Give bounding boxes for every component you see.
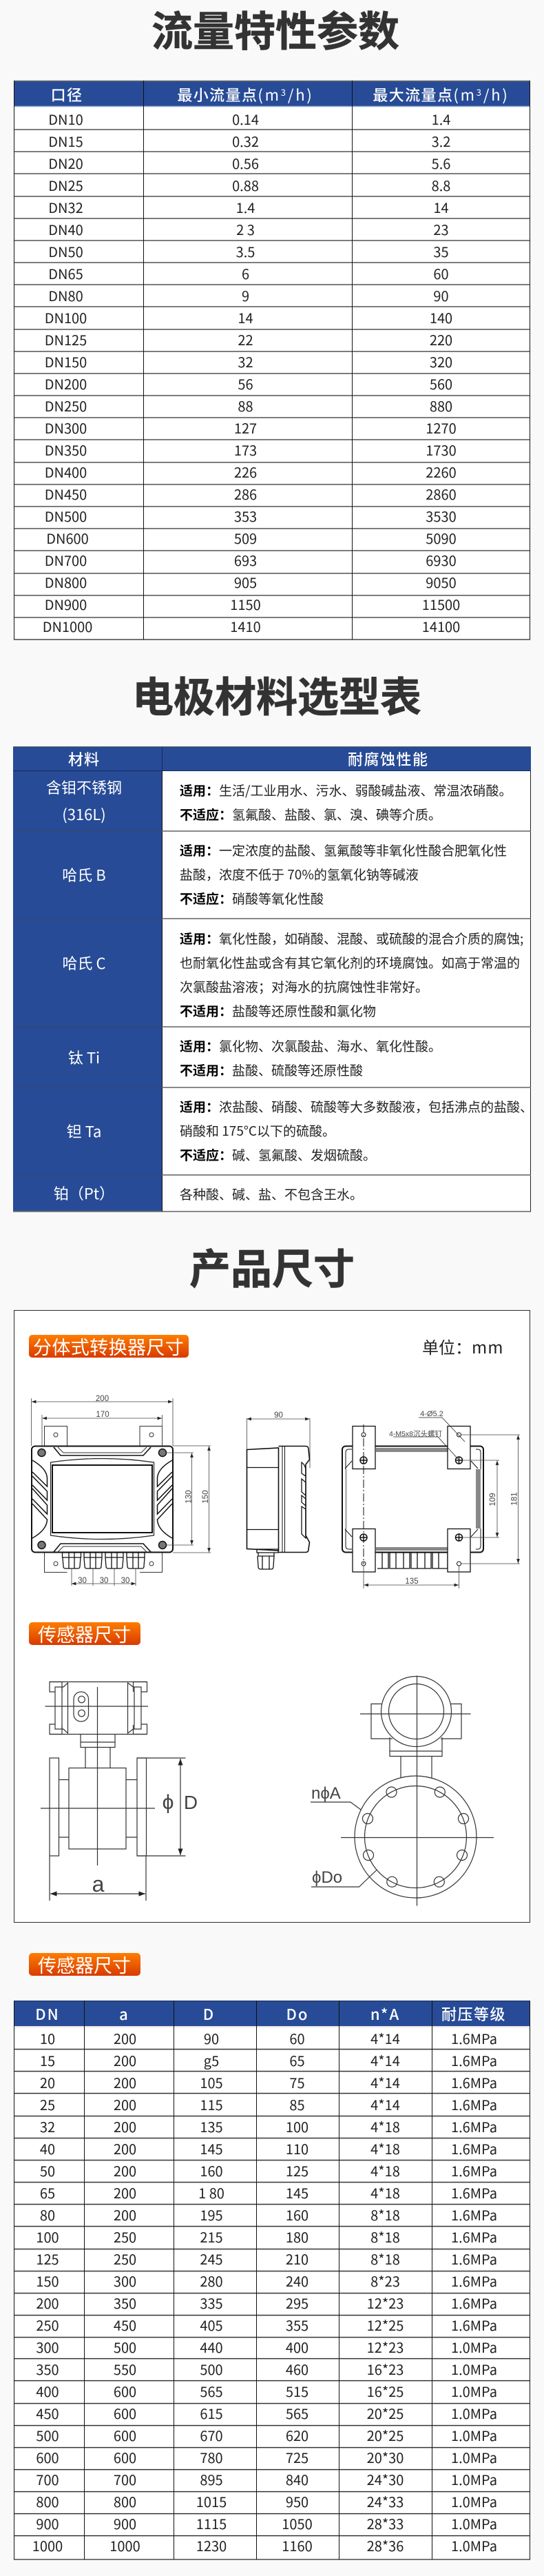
sensor dimensions table: 600 bbox=[114, 2425, 136, 2445]
sensor dimensions table: 400 bbox=[36, 2381, 59, 2401]
flow characteristic table: 0.14 bbox=[232, 109, 259, 129]
flow characteristic table: 0.56 bbox=[232, 153, 259, 173]
sensor dimensions table: 405 bbox=[200, 2315, 223, 2335]
sensor dimensions table: 840 bbox=[286, 2469, 308, 2489]
flow characteristic table: 1270 bbox=[426, 418, 457, 438]
flow characteristic table: 56 bbox=[238, 374, 253, 393]
converter front view dimensions bbox=[32, 1395, 211, 1586]
material row: titanium: 钛 Ti bbox=[68, 1046, 100, 1068]
sensor dimensions table: 20*25 bbox=[367, 2425, 404, 2445]
sensor dimensions table: 1000 bbox=[32, 2535, 63, 2555]
material row: Hastelloy C: 哈氏 C bbox=[63, 952, 105, 974]
flow characteristic table: 9050 bbox=[426, 572, 457, 592]
flow characteristic table: DN32 bbox=[48, 197, 83, 217]
flow characteristic table: 173 bbox=[234, 440, 257, 460]
sensor dimensions table: DN bbox=[35, 2003, 60, 2025]
material row: platinum: 铂（Pt） bbox=[54, 1182, 114, 1204]
sensor dimensions table: 4*18 bbox=[370, 2138, 400, 2158]
material row: Hastelloy B bbox=[13, 832, 531, 919]
sensor dimensions table: 125 bbox=[286, 2160, 308, 2180]
flow characteristic table bbox=[43, 83, 510, 636]
converter front view dimensions: 150 bbox=[202, 1490, 210, 1504]
sensor dimensions table: 12*25 bbox=[367, 2315, 404, 2335]
sensor dimensions table: 355 bbox=[286, 2315, 308, 2335]
flow characteristic table: 23 bbox=[433, 219, 449, 239]
material row: Hastelloy C: 也耐氧化性盐或含有其它氧化剂的环境腐蚀。如高于常温的 bbox=[180, 953, 520, 972]
flow characteristic table: 220 bbox=[430, 329, 452, 349]
converter front view dimensions: 170 bbox=[96, 1411, 109, 1419]
title: electrode material selection: 电极材料选型表 bbox=[132, 664, 421, 724]
material row: titanium: 不适用：盐酸、硫酸等还原性酸 bbox=[180, 1061, 363, 1079]
flow characteristic table: DN400 bbox=[45, 462, 87, 482]
sensor dimensions table: 1.6MPa bbox=[451, 2249, 497, 2269]
sensor dimensions table: 335 bbox=[200, 2293, 223, 2313]
sensor dimensions table: 160 bbox=[200, 2160, 223, 2180]
sensor dimensions table: 1.0MPa bbox=[451, 2535, 497, 2555]
sensor dimensions table: 615 bbox=[200, 2403, 223, 2423]
sensor dimensions table: 800 bbox=[114, 2491, 136, 2511]
sensor dimensions table: 725 bbox=[286, 2447, 308, 2467]
sensor dimensions table: 8*18 bbox=[370, 2227, 400, 2247]
converter rear view dimensions: 135 bbox=[405, 1577, 419, 1586]
sensor side drawing: a bbox=[92, 1872, 105, 1897]
flow characteristic table: 0.88 bbox=[232, 175, 259, 195]
flow characteristic table: 14100 bbox=[422, 616, 460, 636]
flow characteristic table: DN300 bbox=[45, 418, 87, 438]
sensor dimensions table: 670 bbox=[200, 2425, 223, 2445]
sensor dimensions table: 280 bbox=[200, 2271, 223, 2291]
sensor dimensions table: 145 bbox=[286, 2183, 308, 2202]
sensor table grid and background bbox=[14, 2001, 530, 2560]
converter front view dimensions: 30 bbox=[100, 1577, 108, 1585]
flow characteristic table: DN25 bbox=[48, 175, 83, 195]
sensor dimensions table: 80 bbox=[40, 2205, 55, 2225]
flow characteristic table: 226 bbox=[234, 462, 257, 482]
sensor front drawing: ϕDo bbox=[312, 1868, 342, 1887]
table header: 耐腐蚀性能 bbox=[348, 748, 429, 770]
flow characteristic table: 35 bbox=[433, 241, 449, 261]
flow characteristic table: 8.8 bbox=[432, 175, 450, 195]
sensor dimensions table: 20*25 bbox=[367, 2403, 404, 2423]
material row: platinum bbox=[13, 1176, 531, 1212]
sensor dimensions table: 500 bbox=[36, 2425, 59, 2445]
material row: tantalum: 适用：浓盐酸、硝酸、硫酸等大多数酸液，包括沸点的盐酸、 bbox=[180, 1097, 533, 1116]
material row: tantalum: 不适应：碱、氢氟酸、发烟硫酸。 bbox=[180, 1145, 376, 1164]
sensor dimensions table: 245 bbox=[200, 2249, 223, 2269]
sensor dimensions table: 8*18 bbox=[370, 2249, 400, 2269]
flow characteristic table: 2860 bbox=[426, 484, 457, 504]
flow characteristic table: 90 bbox=[433, 285, 449, 305]
converter rear view dimensions bbox=[364, 1410, 520, 1588]
sensor dimensions table: 24*33 bbox=[367, 2491, 404, 2511]
sensor dimensions table: 1 80 bbox=[198, 2183, 224, 2202]
sensor dimensions table: 565 bbox=[286, 2403, 308, 2423]
sensor dimensions table: 895 bbox=[200, 2469, 223, 2489]
sensor dimensions table: 800 bbox=[36, 2491, 59, 2511]
material row: Hastelloy C: 不适用：盐酸等还原性酸和氯化物 bbox=[180, 1001, 376, 1020]
flow characteristic table: 5.6 bbox=[432, 153, 450, 173]
flow characteristic table: 509 bbox=[234, 528, 257, 548]
sensor dimensions table: 150 bbox=[36, 2271, 59, 2291]
flow characteristic table: DN1000 bbox=[43, 616, 92, 636]
sensor dimensions table: 耐压等级 bbox=[441, 2003, 506, 2025]
table header: 材料 bbox=[68, 748, 100, 770]
flow characteristic table: 3530 bbox=[426, 506, 457, 526]
sensor dimensions table: 16*25 bbox=[367, 2381, 404, 2401]
unit label: 单位：mm bbox=[422, 1334, 503, 1358]
sensor dimensions table: 1.0MPa bbox=[451, 2359, 497, 2379]
sensor dimensions table: 65 bbox=[289, 2050, 305, 2070]
flow table grid and background bbox=[14, 80, 530, 640]
sensor dimensions table: 200 bbox=[114, 2138, 136, 2158]
sensor dimensions table: g5 bbox=[204, 2050, 219, 2070]
sensor dimensions table: 100 bbox=[36, 2227, 59, 2247]
sensor dimensions table: 135 bbox=[200, 2116, 223, 2136]
sensor dimensions table: 1.6MPa bbox=[451, 2160, 497, 2180]
flow characteristic table: 32 bbox=[238, 351, 253, 371]
sensor front drawing bbox=[311, 1676, 494, 1906]
sensor dimensions table: 1.6MPa bbox=[451, 2028, 497, 2048]
material row: molybdenum stainless steel: (316L) bbox=[62, 803, 106, 825]
sensor dimensions table: 780 bbox=[200, 2447, 223, 2467]
sensor dimensions table: 4*14 bbox=[370, 2094, 400, 2114]
sensor dimensions table: 28*33 bbox=[367, 2513, 404, 2533]
flow characteristic table: 1730 bbox=[426, 440, 457, 460]
sensor dimensions table: 1.0MPa bbox=[451, 2447, 497, 2467]
sensor dimensions table: 600 bbox=[114, 2381, 136, 2401]
flow characteristic table: DN100 bbox=[45, 307, 87, 327]
flow characteristic table: DN600 bbox=[46, 528, 89, 548]
sensor dimensions table: 85 bbox=[289, 2094, 305, 2114]
sensor dimensions table: 4*14 bbox=[370, 2050, 400, 2070]
sensor dimensions table: 565 bbox=[200, 2381, 223, 2401]
sensor dimensions table: 600 bbox=[114, 2447, 136, 2467]
converter front view bbox=[32, 1427, 173, 1573]
sensor dimensions table: 1.6MPa bbox=[451, 2205, 497, 2225]
flow characteristic table: DN80 bbox=[48, 285, 83, 305]
flow characteristic table: 60 bbox=[433, 263, 449, 283]
sensor dimensions table: 1.0MPa bbox=[451, 2425, 497, 2445]
sensor dimensions table: 8*18 bbox=[370, 2205, 400, 2225]
sensor dimensions table: 195 bbox=[200, 2205, 223, 2225]
sensor dimensions table: 100 bbox=[286, 2116, 308, 2136]
sensor dimensions table: 1.6MPa bbox=[451, 2072, 497, 2092]
sensor dimensions table: 215 bbox=[200, 2227, 223, 2247]
sensor dimensions table: 600 bbox=[114, 2403, 136, 2423]
sensor dimensions table: 450 bbox=[36, 2403, 59, 2423]
sensor dimensions table: 8*23 bbox=[370, 2271, 400, 2291]
converter rear view dimensions: 109 bbox=[489, 1493, 497, 1506]
flow characteristic table: 880 bbox=[430, 396, 452, 416]
sensor dimensions table bbox=[32, 2003, 506, 2555]
sensor dimensions table: 450 bbox=[114, 2315, 136, 2335]
material row: titanium bbox=[13, 1028, 531, 1088]
flow characteristic table: 140 bbox=[430, 307, 452, 327]
converter front view dimensions: 200 bbox=[96, 1395, 109, 1403]
sensor dimensions table: 16*23 bbox=[367, 2359, 404, 2379]
material row: tantalum bbox=[13, 1088, 533, 1176]
converter side view bbox=[247, 1411, 310, 1569]
sensor dimensions table: 200 bbox=[114, 2205, 136, 2225]
material row: tantalum: 硝酸和 175°C以下的硫酸。 bbox=[180, 1121, 335, 1140]
sensor dimensions table: Do bbox=[286, 2003, 308, 2025]
sensor side drawing bbox=[41, 1681, 198, 1901]
sensor dimensions table: 200 bbox=[114, 2028, 136, 2048]
flow characteristic table: DN800 bbox=[45, 572, 87, 592]
flow characteristic table: 3.5 bbox=[236, 241, 255, 261]
sensor dimensions table: 1.6MPa bbox=[451, 2227, 497, 2247]
sensor dimensions table: 700 bbox=[36, 2469, 59, 2489]
sensor dimensions table: 24*30 bbox=[367, 2469, 404, 2489]
flow characteristic table: 1.4 bbox=[236, 197, 255, 217]
flow characteristic table: 1.4 bbox=[432, 109, 450, 129]
material row: Hastelloy C: 次氯酸盐溶液；对海水的抗腐蚀性非常好。 bbox=[180, 977, 428, 996]
flow characteristic table: 22 bbox=[238, 329, 253, 349]
flow characteristic table: DN15 bbox=[48, 131, 83, 151]
sensor dimensions table: 1.6MPa bbox=[451, 2138, 497, 2158]
sensor dimensions table: 1.6MPa bbox=[451, 2116, 497, 2136]
sensor dimensions table: 160 bbox=[286, 2205, 308, 2225]
flow characteristic table: 320 bbox=[430, 351, 452, 371]
sensor dimensions table: 4*14 bbox=[370, 2028, 400, 2048]
sensor dimensions table: 1.0MPa bbox=[451, 2469, 497, 2489]
flow characteristic table: 最小流量点(m3/h) bbox=[177, 83, 314, 105]
converter rear view dimensions: 4-M5x8沉头螺钉 bbox=[389, 1429, 443, 1438]
flow characteristic table: DN50 bbox=[48, 241, 83, 261]
sensor dimensions table: 700 bbox=[114, 2469, 136, 2489]
sensor dimensions table: 250 bbox=[114, 2227, 136, 2247]
material row: Hastelloy C bbox=[13, 919, 531, 1028]
sensor dimensions table: 200 bbox=[114, 2116, 136, 2136]
material row: tantalum: 钽 Ta bbox=[67, 1120, 101, 1142]
sensor dimensions table: 4*18 bbox=[370, 2160, 400, 2180]
converter rear view dimensions: 181 bbox=[511, 1492, 519, 1506]
sensor dimensions table: 440 bbox=[200, 2337, 223, 2357]
sensor dimensions table: 12*23 bbox=[367, 2337, 404, 2357]
material row: molybdenum stainless steel: 含钼不锈钢 bbox=[46, 776, 122, 798]
title: product dimensions: 产品尺寸 bbox=[189, 1236, 355, 1296]
panel: dimension drawings bbox=[14, 1310, 530, 1923]
sensor dimensions table: 950 bbox=[286, 2491, 308, 2511]
sensor dimensions table: 145 bbox=[200, 2138, 223, 2158]
flow characteristic table: 3.2 bbox=[432, 131, 450, 151]
flow characteristic table: 14 bbox=[238, 307, 253, 327]
sensor dimensions table: 900 bbox=[114, 2513, 136, 2533]
flow characteristic table: 353 bbox=[234, 506, 257, 526]
converter rear view dimensions: 4-Ø5.2 bbox=[420, 1410, 443, 1418]
flow characteristic table: 最大流量点(m3/h) bbox=[373, 83, 510, 105]
flow characteristic table: 5090 bbox=[426, 528, 457, 548]
sensor dimensions table: 200 bbox=[114, 2050, 136, 2070]
sensor dimensions table: 210 bbox=[286, 2249, 308, 2269]
sensor dimensions table: 32 bbox=[40, 2116, 55, 2136]
material row: molybdenum stainless steel: 不适应：氢氟酸、盐酸、氯、溴、碘等介质。 bbox=[180, 805, 441, 824]
sensor dimensions table: 25 bbox=[40, 2094, 55, 2114]
sensor dimensions table: 1.0MPa bbox=[451, 2491, 497, 2511]
flow characteristic table: DN150 bbox=[45, 351, 87, 371]
sensor dimensions table: 900 bbox=[36, 2513, 59, 2533]
sensor dimensions table: 1.6MPa bbox=[451, 2094, 497, 2114]
material row: molybdenum stainless steel: 适用：生活/工业用水、污水、弱酸碱盐液、常温浓硝酸。 bbox=[180, 781, 512, 799]
material row: Hastelloy C: 适用：氧化性酸，如硝酸、混酸、或硫酸的混合介质的腐蚀; bbox=[180, 929, 523, 948]
flow characteristic table: DN125 bbox=[45, 329, 87, 349]
flow characteristic table: 560 bbox=[430, 374, 452, 393]
sensor dimensions table: 200 bbox=[114, 2160, 136, 2180]
sensor front drawing: nϕA bbox=[311, 1784, 341, 1803]
sensor dimensions table: 20 bbox=[40, 2072, 55, 2092]
sensor dimensions table: 400 bbox=[286, 2337, 308, 2357]
flow characteristic table: 905 bbox=[234, 572, 257, 592]
sensor dimensions table: 250 bbox=[114, 2249, 136, 2269]
sensor dimensions table: 28*36 bbox=[367, 2535, 404, 2555]
sensor side drawing: D bbox=[184, 1792, 198, 1813]
sensor dimensions table: 1015 bbox=[196, 2491, 227, 2511]
sensor dimensions table: 350 bbox=[114, 2293, 136, 2313]
sensor dimensions table: 300 bbox=[114, 2271, 136, 2291]
flow characteristic table: DN250 bbox=[45, 396, 87, 416]
sensor dimensions table: a bbox=[119, 2003, 129, 2025]
converter front view dimensions: 30 bbox=[121, 1577, 129, 1585]
flow characteristic table: DN450 bbox=[45, 484, 87, 504]
sensor dimensions table: 105 bbox=[200, 2072, 223, 2092]
sensor dimensions table: 4*18 bbox=[370, 2116, 400, 2136]
sensor dimensions table: 40 bbox=[40, 2138, 55, 2158]
sensor dimensions table: 110 bbox=[286, 2138, 308, 2158]
flow characteristic table: DN10 bbox=[48, 109, 83, 129]
sensor dimensions table: 4*18 bbox=[370, 2183, 400, 2202]
flow characteristic table: 14 bbox=[433, 197, 449, 217]
sensor dimensions table: 4*14 bbox=[370, 2072, 400, 2092]
sensor dimensions table: 1230 bbox=[196, 2535, 227, 2555]
sensor dimensions table: 500 bbox=[200, 2359, 223, 2379]
sensor dimensions table: 65 bbox=[40, 2183, 55, 2202]
sensor dimensions table: 115 bbox=[200, 2094, 223, 2114]
sensor dimensions table: 200 bbox=[114, 2072, 136, 2092]
sensor dimensions table: 200 bbox=[114, 2183, 136, 2202]
flow characteristic table: 286 bbox=[234, 484, 257, 504]
material row: molybdenum stainless steel bbox=[13, 771, 531, 832]
sensor dimensions table: 600 bbox=[36, 2447, 59, 2467]
material row: Hastelloy B: 适用：一定浓度的盐酸、氢氟酸等非氧化性酸合肥氧化性 bbox=[180, 841, 507, 859]
title: flow characteristic parameters: 流量特性参数 bbox=[151, 0, 399, 59]
sensor dimensions table: 460 bbox=[286, 2359, 308, 2379]
flow characteristic table: DN65 bbox=[48, 263, 83, 283]
flow characteristic table: 88 bbox=[238, 396, 253, 416]
sensor dimensions table: 240 bbox=[286, 2271, 308, 2291]
converter side view: 90 bbox=[274, 1411, 283, 1420]
sensor dimensions table: n*A bbox=[370, 2003, 400, 2025]
converter front view dimensions: 130 bbox=[185, 1490, 193, 1504]
table header bbox=[13, 746, 531, 771]
flow characteristic table: DN700 bbox=[45, 550, 87, 570]
sensor dimensions table: 1.6MPa bbox=[451, 2315, 497, 2335]
electrode material table bbox=[13, 746, 531, 771]
sensor dimensions table: D bbox=[203, 2003, 214, 2025]
sensor dimensions table: 1.6MPa bbox=[451, 2271, 497, 2291]
flow characteristic table: 2 3 bbox=[236, 219, 255, 239]
sensor dimensions table: 550 bbox=[114, 2359, 136, 2379]
drawings overlay bbox=[31, 1395, 520, 1906]
flow characteristic table: 127 bbox=[234, 418, 257, 438]
converter front view dimensions: 30 bbox=[78, 1577, 87, 1585]
sensor dimensions table: 1.6MPa bbox=[451, 2050, 497, 2070]
sensor dimensions table: 1050 bbox=[282, 2513, 313, 2533]
sensor dimensions table: 295 bbox=[286, 2293, 308, 2313]
flow characteristic table: 11500 bbox=[422, 594, 460, 614]
flow characteristic table: DN350 bbox=[45, 440, 87, 460]
material row: platinum: 各种酸、碱、盐、不包含王水。 bbox=[180, 1185, 363, 1203]
sensor dimensions table: 1.0MPa bbox=[451, 2337, 497, 2357]
sensor dimensions table: 1000 bbox=[109, 2535, 140, 2555]
sensor dimensions table: 200 bbox=[36, 2293, 59, 2313]
sensor dimensions table: 125 bbox=[36, 2249, 59, 2269]
sensor dimensions table: 20*30 bbox=[367, 2447, 404, 2467]
sensor dimensions table: 515 bbox=[286, 2381, 308, 2401]
sensor dimensions table: 60 bbox=[289, 2028, 305, 2048]
flow characteristic table: DN20 bbox=[48, 153, 83, 173]
sensor dimensions table: 10 bbox=[40, 2028, 55, 2048]
flow characteristic table: 口径 bbox=[51, 83, 83, 105]
sensor dimensions table: 180 bbox=[286, 2227, 308, 2247]
sensor dimensions table: 50 bbox=[40, 2160, 55, 2180]
sensor dimensions table: 1.0MPa bbox=[451, 2381, 497, 2401]
flow characteristic table: 1410 bbox=[230, 616, 261, 636]
flow characteristic table: 6 bbox=[242, 263, 249, 283]
flow characteristic table: DN500 bbox=[45, 506, 87, 526]
sensor dimensions table: 1115 bbox=[196, 2513, 227, 2533]
flow characteristic table: DN200 bbox=[45, 374, 87, 393]
flow characteristic table: 6930 bbox=[426, 550, 457, 570]
flow characteristic table: 1150 bbox=[230, 594, 261, 614]
sensor dimensions table: 300 bbox=[36, 2337, 59, 2357]
sensor dimensions table: 12*23 bbox=[367, 2293, 404, 2313]
sensor dimensions table: 250 bbox=[36, 2315, 59, 2335]
material row: Hastelloy B: 不适应：硝酸等氧化性酸 bbox=[180, 889, 324, 908]
sensor dimensions table: 1.6MPa bbox=[451, 2183, 497, 2202]
material row: Hastelloy B: 盐酸，浓度不低于 70%的氢氧化钠等碱液 bbox=[180, 865, 419, 883]
sensor side drawing: ϕ bbox=[163, 1791, 174, 1814]
flow characteristic table: 9 bbox=[242, 285, 249, 305]
sensor dimensions table: 500 bbox=[114, 2337, 136, 2357]
flow characteristic table: 2260 bbox=[426, 462, 457, 482]
sensor dimensions table: 1160 bbox=[282, 2535, 313, 2555]
sensor dimensions table: 15 bbox=[40, 2050, 55, 2070]
material row: titanium: 适用：氯化物、次氯酸盐、海水、氧化性酸。 bbox=[180, 1036, 441, 1055]
flow characteristic table: DN900 bbox=[45, 594, 87, 614]
sensor dimensions table: 620 bbox=[286, 2425, 308, 2445]
sensor dimensions table: 90 bbox=[204, 2028, 219, 2048]
material row: Hastelloy B: 哈氏 B bbox=[62, 863, 106, 886]
flow characteristic table: 0.32 bbox=[232, 131, 259, 151]
sensor dimensions table: 350 bbox=[36, 2359, 59, 2379]
flow characteristic table: DN40 bbox=[48, 219, 83, 239]
sensor dimensions table: 1.0MPa bbox=[451, 2513, 497, 2533]
flow characteristic table: 693 bbox=[234, 550, 257, 570]
sensor dimensions table: 75 bbox=[289, 2072, 305, 2092]
sensor dimensions table: 1.6MPa bbox=[451, 2293, 497, 2313]
sensor dimensions table: 1.0MPa bbox=[451, 2403, 497, 2423]
converter rear view bbox=[342, 1424, 483, 1572]
sensor dimensions table: 200 bbox=[114, 2094, 136, 2114]
